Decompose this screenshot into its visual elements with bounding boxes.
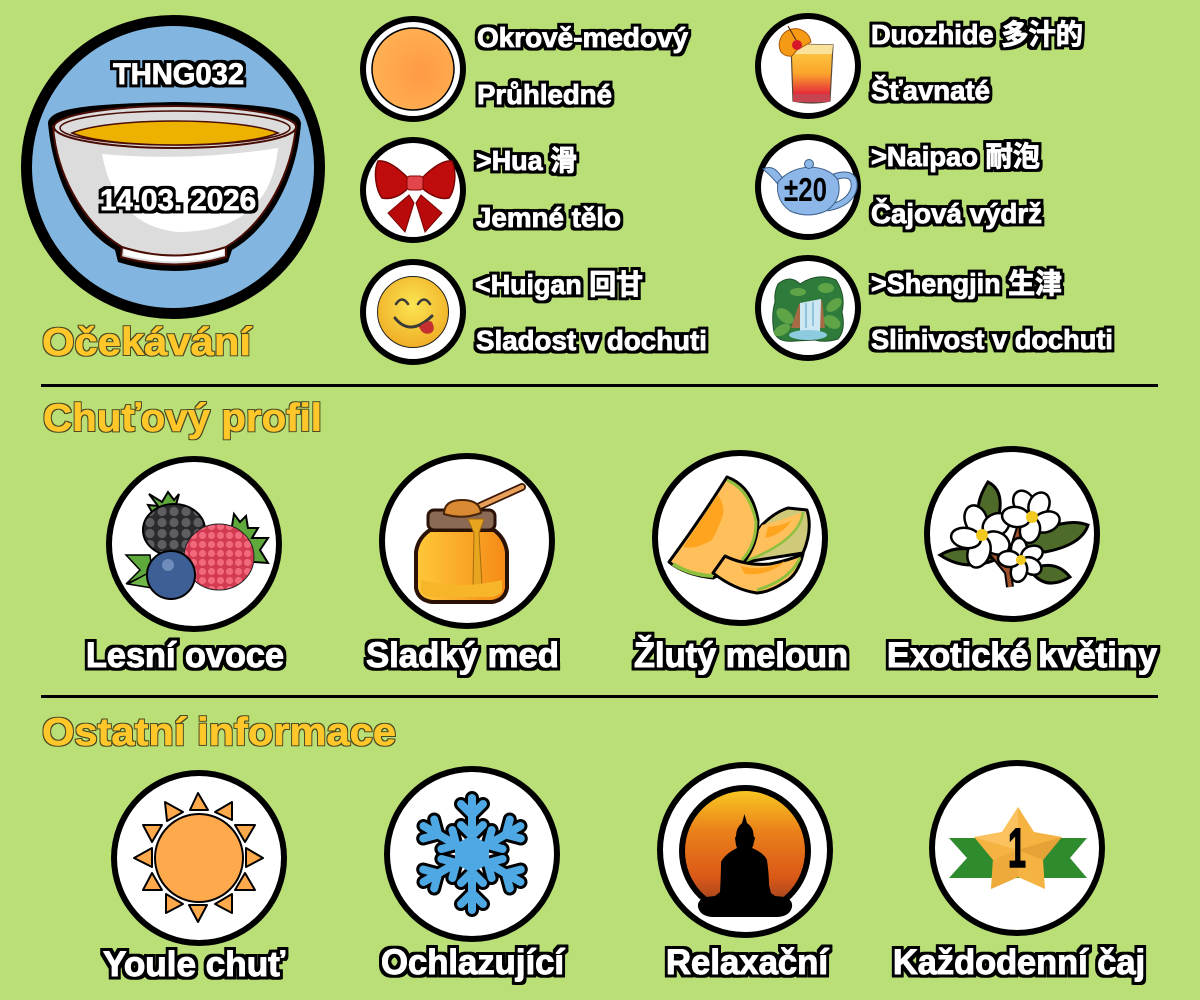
panel: expectation badge with bowl xyxy=(26,20,320,314)
flower upper right xyxy=(1000,487,1063,545)
label: Youle chuť xyxy=(103,945,285,984)
text: colour name: Okrově-medový xyxy=(477,22,688,53)
heading: Očekávání: Očekávání xyxy=(42,321,252,364)
badge circle xyxy=(26,20,320,314)
info: cooling xyxy=(381,769,565,982)
icon: meditating silhouette xyxy=(660,765,830,935)
item: salivation xyxy=(758,258,1113,358)
batch code: THNG032 xyxy=(113,58,244,91)
label: Exotické květiny xyxy=(887,636,1158,675)
flower bottom xyxy=(997,538,1045,584)
info: relaxing xyxy=(660,765,830,982)
icon: flowering branch xyxy=(927,449,1097,619)
item: juiciness xyxy=(758,16,1083,116)
label: Každodenní čaj xyxy=(893,943,1145,982)
icon: teapot xyxy=(758,137,858,237)
icon: tea bowl xyxy=(48,102,301,271)
text: Naipao: >Naipao 耐泡 xyxy=(871,141,1040,172)
icon: snowflake xyxy=(387,769,557,939)
icon: red bow xyxy=(363,140,463,240)
label: Lesní ovoce xyxy=(86,636,284,675)
icon: smiling face xyxy=(363,262,463,362)
icon: amber liquor xyxy=(363,19,463,119)
text: Slinivost v dochuti: Slinivost v dochuti xyxy=(871,324,1113,355)
icon: star with ribbon xyxy=(932,763,1102,933)
text: Duozhide: Duozhide 多汁的 xyxy=(871,19,1083,50)
icon: melon slices xyxy=(655,453,825,623)
date: 14.03. 2026 xyxy=(100,184,256,217)
text: Hua: >Hua 滑 xyxy=(476,145,577,176)
label: Ochlazující xyxy=(381,943,565,982)
icon: cocktail xyxy=(758,16,858,116)
icon: honey jar xyxy=(382,456,552,626)
label: Sladký med xyxy=(366,636,559,675)
icon: teapot: ±20 xyxy=(784,171,827,208)
item: tea endurance xyxy=(758,137,1042,237)
info: warming xyxy=(103,773,285,984)
flavour: forest fruit xyxy=(86,459,284,675)
text: Jemné tělo: Jemné tělo xyxy=(476,202,621,233)
item: smoothness xyxy=(363,140,621,240)
text: clarity: Průhledné xyxy=(477,79,612,110)
label: Relaxační xyxy=(666,943,829,982)
text: Shengjin: >Shengjin 生津 xyxy=(871,268,1062,299)
text: Čajová výdrž: Čajová výdrž xyxy=(871,197,1042,229)
info: everyday tea xyxy=(893,763,1145,982)
text: Sladost v dochuti: Sladost v dochuti xyxy=(476,325,707,356)
flavour: yellow melon xyxy=(634,453,848,675)
heading: Ostatní informace: Ostatní informace xyxy=(42,711,396,754)
text: Huigan: <Huigan 回甘 xyxy=(475,269,643,300)
flavour: exotic flowers xyxy=(887,449,1158,675)
item: colour xyxy=(363,19,688,119)
text: Šťavnaté: Šťavnaté xyxy=(871,74,990,106)
flavour: sweet honey xyxy=(366,456,559,675)
icon: berries xyxy=(109,459,279,629)
icon: sun xyxy=(114,773,284,943)
label: Žlutý meloun xyxy=(634,635,848,675)
flower left xyxy=(949,502,1014,571)
icon: star with ribbon: 1 xyxy=(1008,816,1026,879)
item: aftertaste sweetness xyxy=(363,262,707,362)
icon: jungle waterfall xyxy=(758,258,858,358)
heading: Chuťový profil: Chuťový profil xyxy=(43,397,322,440)
